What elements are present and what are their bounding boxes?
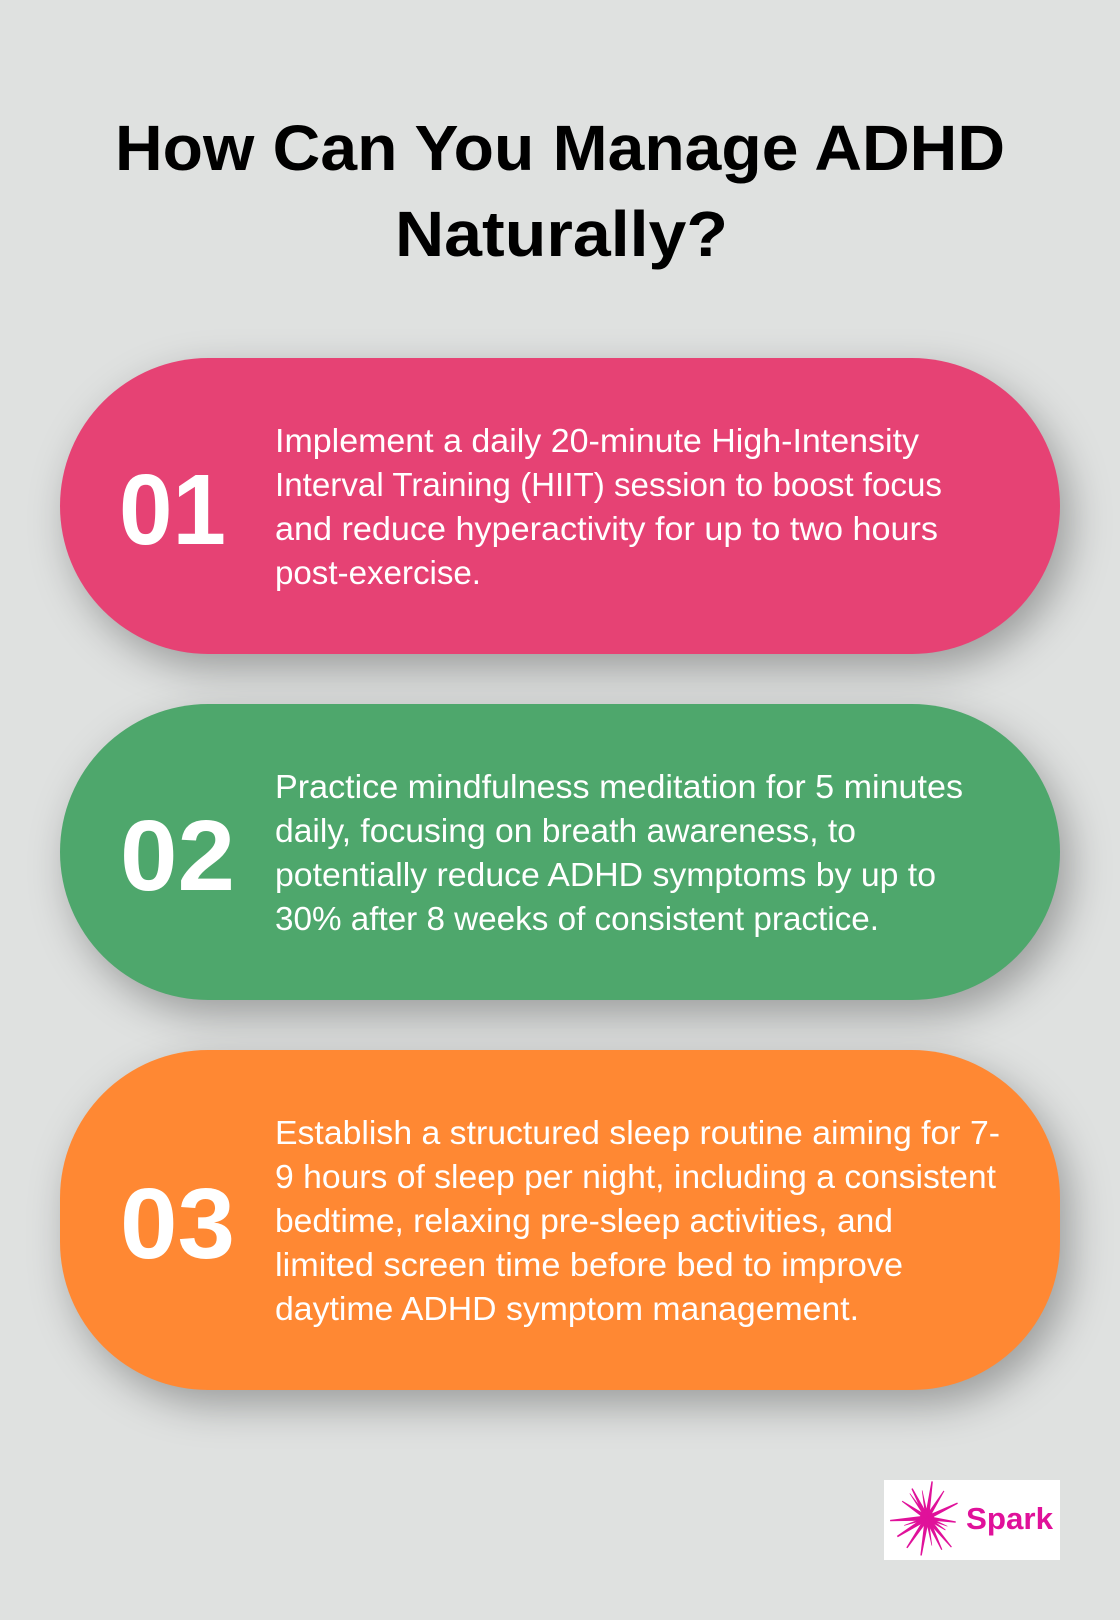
icon: starburst bbox=[890, 1481, 959, 1556]
text: step 01 description: Implement a daily 20-minute High-Intensity bbox=[275, 422, 920, 459]
text: step 01 description: Interval Training (HIIT) session to boost focus bbox=[275, 466, 942, 503]
number 03: 03 bbox=[120, 1168, 235, 1280]
logo wordmark: Spark bbox=[966, 1501, 1054, 1536]
text: step 03 description: daytime ADHD symptom management. bbox=[275, 1290, 859, 1327]
panel: step 03 bbox=[60, 1050, 1060, 1390]
title: How Can You Manage ADHD bbox=[115, 112, 1005, 184]
number 01: 01 bbox=[119, 454, 226, 566]
text: step 01 description bbox=[275, 422, 942, 591]
text: step 03 description: bedtime, relaxing pre-sleep activities, and bbox=[275, 1202, 893, 1239]
panel: step 01 bbox=[60, 358, 1060, 654]
text: step 03 description: limited screen time before bed to improve bbox=[275, 1246, 903, 1283]
text: step 03 description bbox=[275, 1114, 1000, 1327]
text: step 03 description: Establish a structured sleep routine aiming for 7- bbox=[275, 1114, 1000, 1151]
panel: step 02 bbox=[60, 704, 1060, 1000]
number 02: 02 bbox=[120, 800, 235, 912]
text: step 02 description: daily, focusing on breath awareness, to bbox=[275, 812, 856, 849]
text: step 01 description: and reduce hyperactivity for up to two hours bbox=[275, 510, 938, 547]
title bbox=[115, 112, 1005, 270]
logo: Spark bbox=[884, 1480, 1060, 1560]
text: step 02 description: potentially reduce ADHD symptoms by up to bbox=[275, 856, 936, 893]
title: Naturally? bbox=[395, 198, 728, 270]
text: step 02 description bbox=[275, 768, 963, 937]
text: step 02 description: 30% after 8 weeks of consistent practice. bbox=[275, 900, 879, 937]
text: step 01 description: post-exercise. bbox=[275, 554, 481, 591]
text: step 03 description: 9 hours of sleep per night, including a consistent bbox=[275, 1158, 996, 1195]
text: step 02 description: Practice mindfulness meditation for 5 minutes bbox=[275, 768, 963, 805]
